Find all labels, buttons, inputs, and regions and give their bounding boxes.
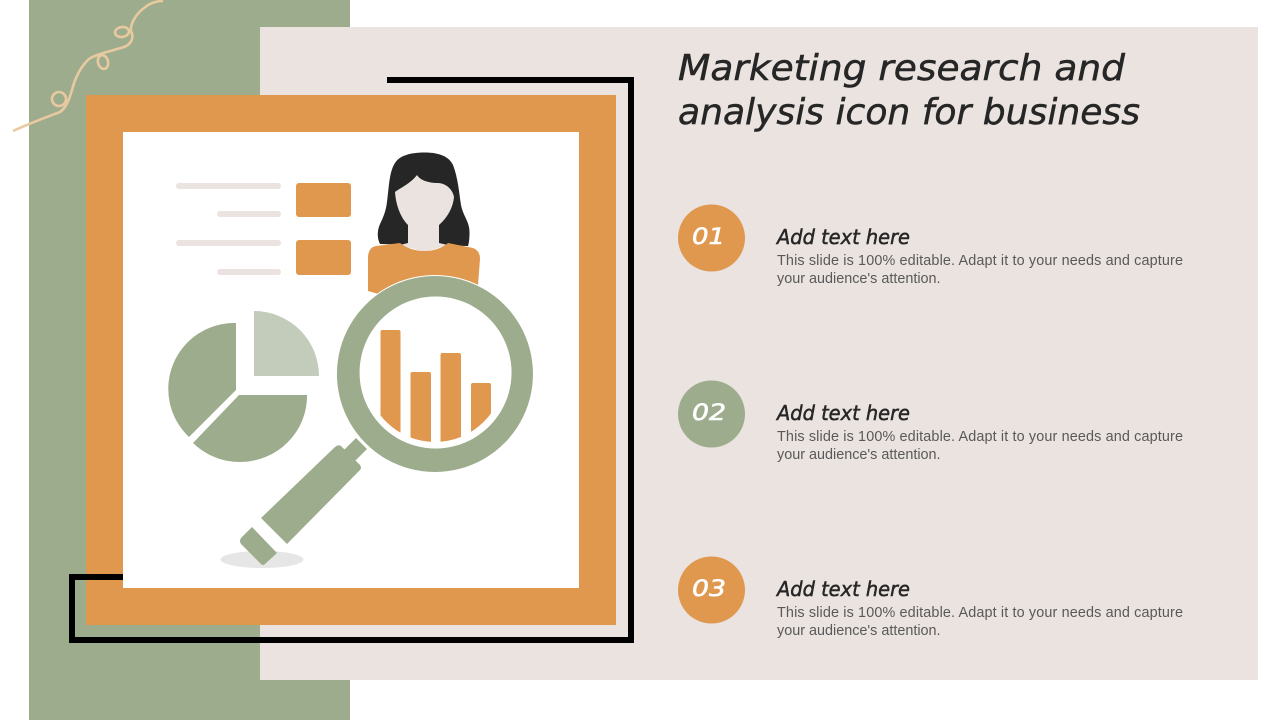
item 02 [678,380,1183,463]
number badge 01: 01 [692,225,725,250]
body text 01: This slide is 100% editable. Adapt it to your needs and capture [777,253,1183,269]
number badge 02: 02 [692,401,726,426]
body text 03: This slide is 100% editable. Adapt it to your needs and capture [777,605,1183,621]
black offset frame [72,80,631,640]
item 01 [678,204,1183,287]
title: analysis icon for business [678,92,1140,133]
number badge 03: 03 [692,577,726,602]
white inner panel [123,132,579,588]
heading 03: Add text here [775,577,910,601]
illustration: market research [168,152,534,568]
item 03 [678,556,1183,639]
body text 03: your audience's attention. [777,623,941,639]
green background panel [29,0,350,720]
body text 02: This slide is 100% editable. Adapt it to your needs and capture [777,429,1183,445]
body text 02: your audience's attention. [777,447,941,463]
beige content panel [260,27,1258,680]
orange frame [86,95,616,625]
icon: woman [368,152,480,300]
heading 01: Add text here [775,225,910,249]
number badge 01 [678,204,745,272]
bar chart in lens [380,330,491,442]
number badge 02 [678,380,745,448]
decorative squiggle [13,1,163,131]
list lines and boxes [176,183,351,275]
icon: magnifying glass [220,275,534,568]
body text 01: your audience's attention. [777,271,941,287]
pie chart [168,311,319,462]
heading 02: Add text here [775,401,910,425]
number badge 03 [678,556,745,624]
title: Marketing research and [678,48,1126,89]
